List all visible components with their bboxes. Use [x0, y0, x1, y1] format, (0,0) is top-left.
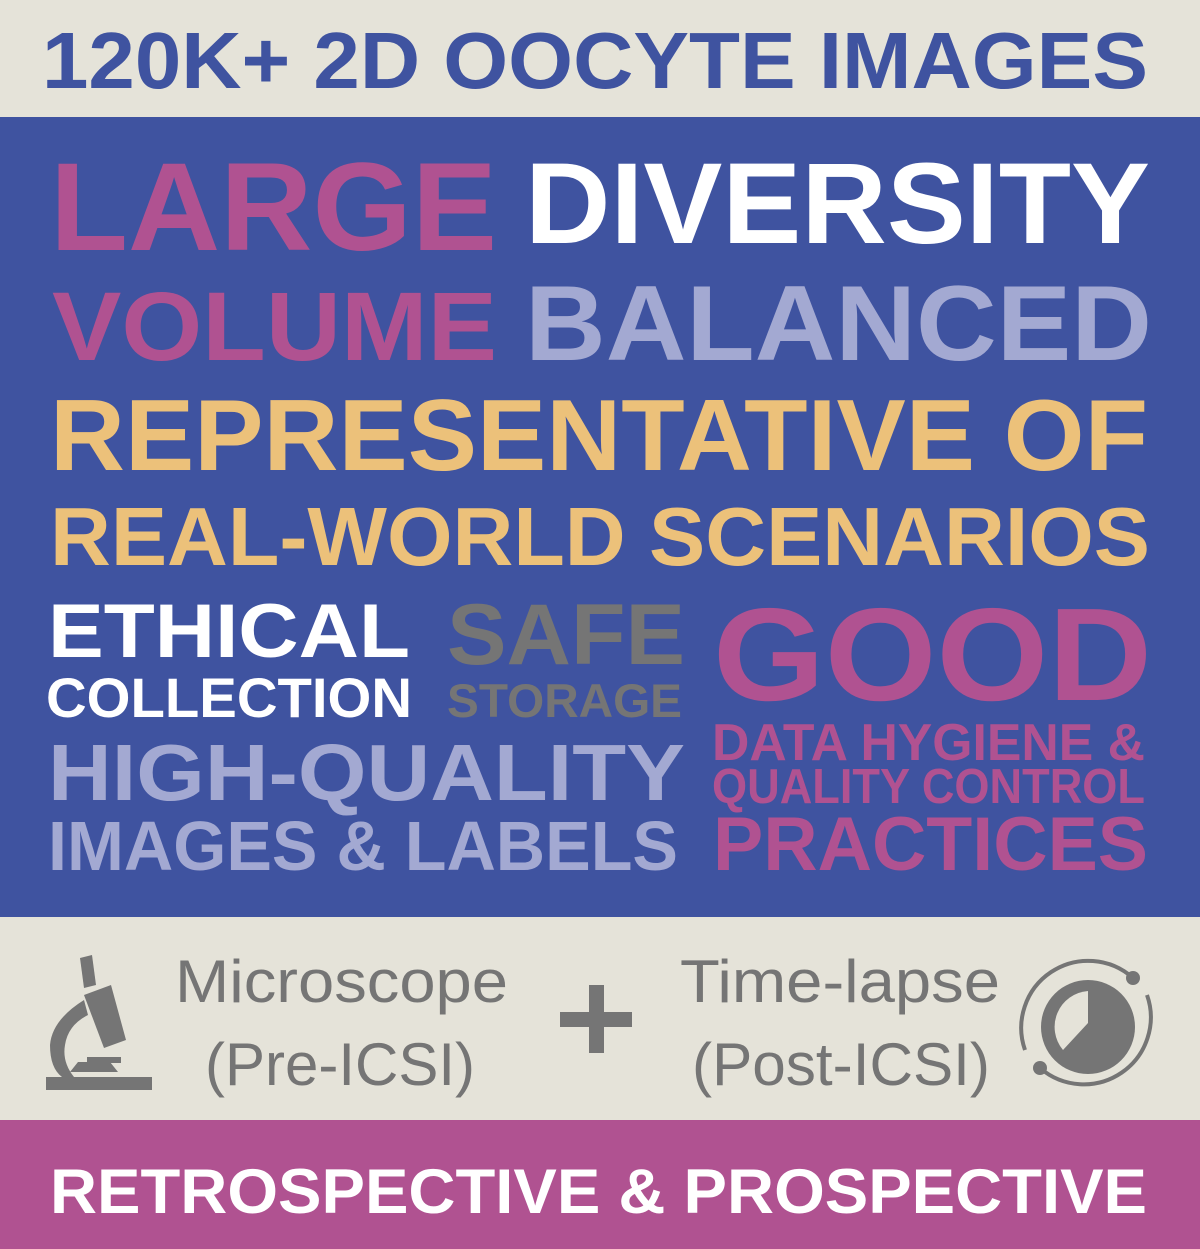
text: high-quality images: HIGH-QUALITY [48, 728, 685, 817]
word: LARGE: LARGE [50, 138, 497, 277]
text: microscope pre-ICSI [175, 948, 508, 1098]
text: representative of: REPRESENTATIVE OF [50, 380, 1148, 492]
icon: microscope [46, 955, 152, 1090]
text: real-world scenarios: REAL-WORLD SCENARIOS [50, 490, 1150, 583]
text: good data hygiene: DATA HYGIENE & [712, 714, 1145, 772]
text: microscope pre-ICSI: Microscope [175, 948, 508, 1015]
text: time-lapse post-ICSI [680, 948, 1000, 1098]
text: good data hygiene: PRACTICES [713, 802, 1148, 887]
text: high-quality images: IMAGES & LABELS [48, 807, 678, 885]
text: ethical collection: COLLECTION [46, 666, 412, 729]
text: safe storage [447, 587, 685, 727]
footer bar: RETROSPECTIVE & PROSPECTIVE [50, 1157, 1147, 1227]
text: ethical collection: ETHICAL [48, 589, 410, 674]
footer bar [0, 1120, 1200, 1249]
text: time-lapse post-ICSI: Time-lapse [680, 948, 1000, 1015]
title: 120K+ 2D OOCYTE IMAGES [42, 16, 1148, 105]
word: DIVERSITY: DIVERSITY [525, 140, 1150, 268]
word: BALANCED: BALANCED [525, 263, 1152, 383]
word: VOLUME: VOLUME [52, 272, 497, 381]
panel: qualities word cloud [0, 117, 1200, 917]
text: safe storage: STORAGE [447, 674, 682, 727]
text: ethical collection [46, 589, 412, 729]
text: time-lapse post-ICSI: (Post-ICSI) [692, 1031, 990, 1098]
text: microscope pre-ICSI: (Pre-ICSI) [205, 1031, 475, 1098]
text: good data hygiene: QUALITY CONTROL [712, 760, 1145, 814]
text: good data hygiene [712, 581, 1152, 887]
text: high-quality images [48, 728, 685, 885]
text: safe storage: SAFE [447, 587, 685, 683]
icon: time-lapse clock [1021, 961, 1151, 1084]
icon: plus [560, 985, 632, 1053]
text: good data hygiene: GOOD [713, 581, 1152, 728]
